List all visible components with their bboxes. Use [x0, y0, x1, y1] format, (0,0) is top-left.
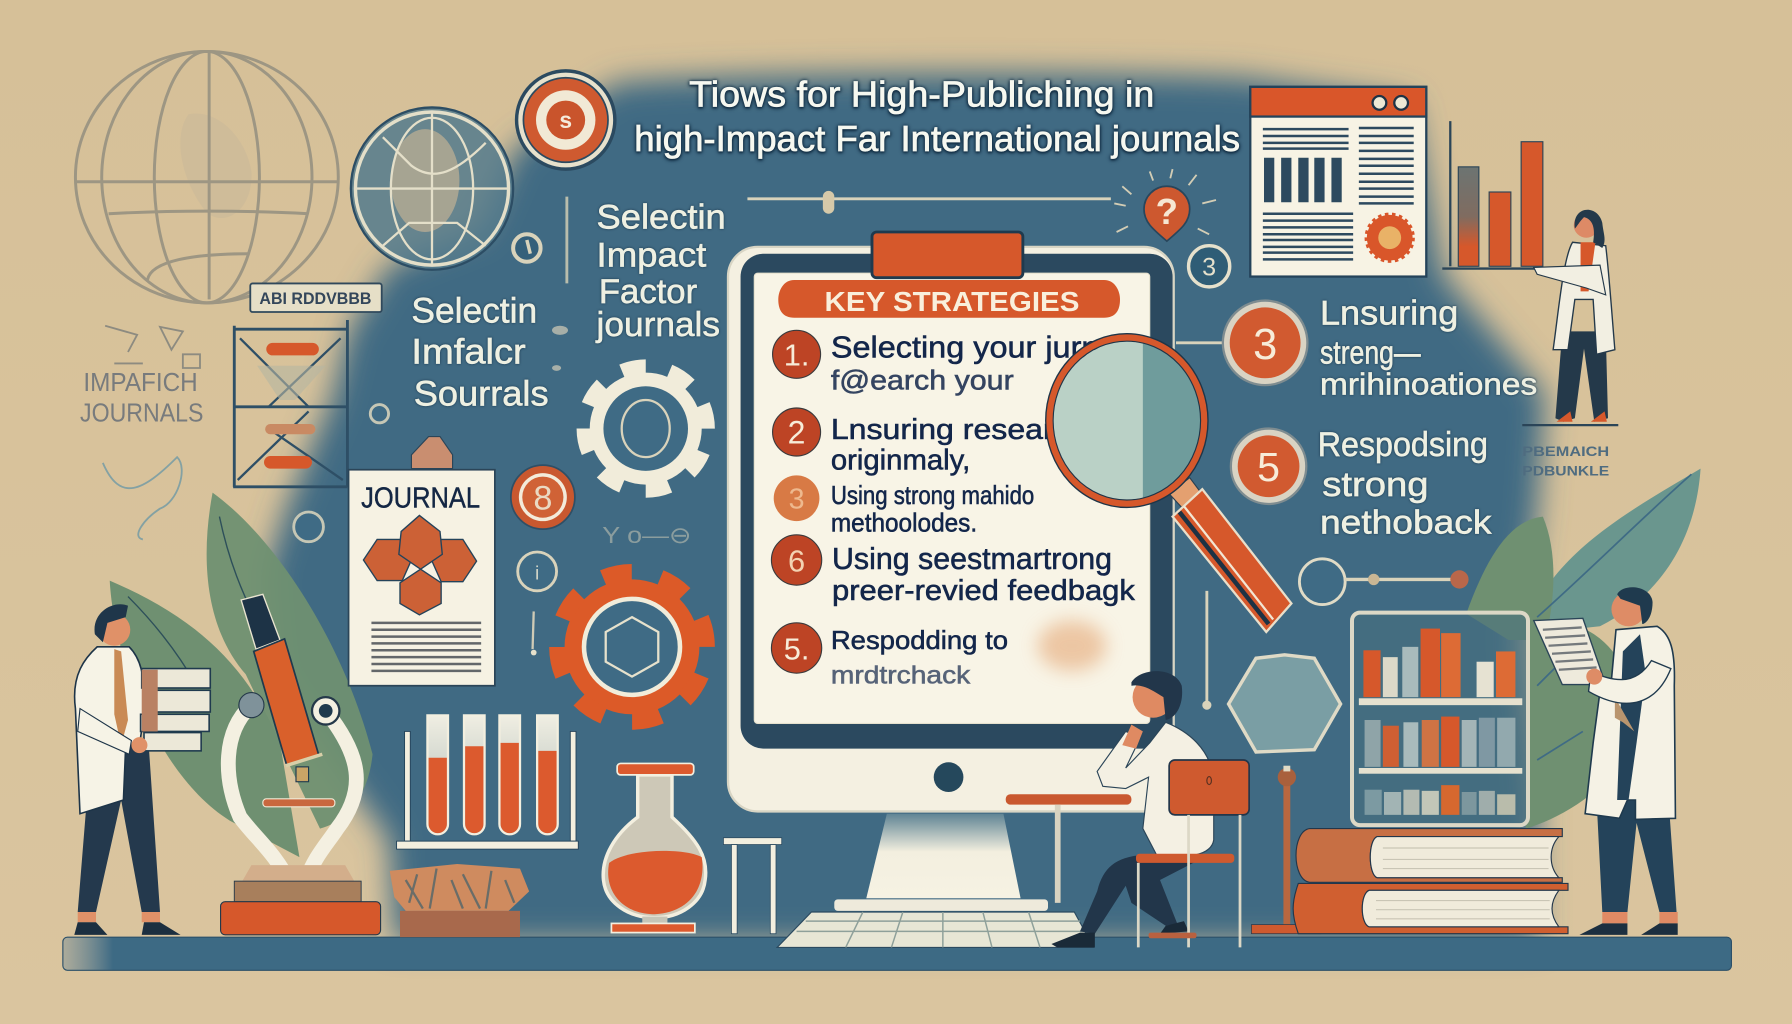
callout: responding: strong [1322, 466, 1429, 504]
leaves: left [110, 493, 373, 857]
gear: cream [565, 348, 726, 509]
bottom row books [1365, 785, 1515, 815]
label: selecting impact factor journals: Impact [597, 236, 707, 274]
coat [1585, 626, 1675, 819]
arm and hand [78, 709, 131, 754]
figure: man with books [74, 604, 210, 935]
figure: man with paper [1534, 587, 1678, 935]
leaves: right [1466, 469, 1701, 829]
icon: large wireframe globe [75, 51, 338, 303]
lab coat [75, 647, 144, 814]
head [1133, 677, 1174, 718]
icon: question bulb [1114, 169, 1216, 241]
label: selectin sourrals [411, 290, 549, 414]
table [1006, 794, 1131, 903]
blue backdrop [265, 73, 1545, 943]
header dots [1373, 96, 1408, 110]
strategy 2: Lnsuring resear [831, 414, 1054, 446]
ankles and shoes [78, 912, 160, 922]
journal text lines [371, 623, 481, 671]
callout: ensuring: streng— [1320, 334, 1421, 370]
strategy 5: mrdtrchack [831, 661, 971, 689]
icon: question bulb: ? [1156, 191, 1178, 232]
journal heading: JOURNAL [361, 482, 480, 514]
handle [1169, 478, 1291, 632]
lens [1054, 342, 1200, 499]
label: selecting impact factor journals: journals [596, 306, 720, 344]
strategy 4 [771, 535, 1136, 607]
monitor [728, 232, 1174, 911]
vertical rod [1202, 591, 1211, 710]
strategy 1: f@earch your [831, 365, 1014, 396]
bar chart [1442, 121, 1557, 269]
big books [1293, 829, 1568, 934]
callout: ensuring [1176, 295, 1537, 401]
icon: target badge [517, 71, 615, 169]
floor [63, 937, 1731, 970]
callout: ensuring: 3 [1253, 321, 1277, 369]
stage [263, 799, 335, 807]
title: Tiows for High-Publiching in [689, 73, 1154, 114]
label: research text faint: PBEMAICH [1522, 444, 1609, 459]
icon: 8 badge [511, 465, 575, 529]
rubble pile [390, 864, 529, 937]
label: faded impact journals: IMPAFICH [83, 367, 198, 397]
label: selectin sourrals: Imfalcr [411, 331, 526, 371]
strategy 1: 1. [784, 338, 809, 373]
chair [1136, 760, 1249, 947]
strategy 4: 6 [788, 543, 805, 578]
strategy 3: Using strong mahido [831, 480, 1034, 510]
tag label: ABI RDDVBBB [259, 289, 371, 308]
head [1611, 592, 1646, 626]
magnifying glass [1046, 334, 1291, 632]
key strategies banner [778, 280, 1120, 318]
icon: target badge: s [559, 107, 572, 133]
bottom book [1293, 883, 1568, 934]
slider line [747, 191, 1111, 214]
clip tab [872, 232, 1023, 278]
title: high-Impact Far International journals [634, 118, 1240, 159]
trousers [1597, 800, 1677, 912]
label: faded impact journals: JOURNALS [80, 398, 203, 428]
label: selecting impact factor journals: Selectin [597, 199, 726, 237]
label: research text faint: PDBUNKLE [1522, 463, 1609, 478]
document header [1250, 87, 1426, 117]
test tube rack [397, 715, 578, 849]
callout: ensuring: Lnsuring [1320, 295, 1458, 333]
figure: seated man [1051, 671, 1214, 947]
head [98, 614, 130, 646]
gear: orange [535, 550, 729, 744]
strategy 5 [771, 623, 1008, 689]
shoes [1051, 921, 1189, 947]
top row books [1363, 629, 1515, 697]
icon: pin ring: i [535, 562, 539, 584]
icon: 8 badge: 8 [533, 480, 552, 518]
icon: pin ring [518, 552, 557, 655]
label: selectin sourrals: Selectin [411, 290, 537, 330]
seal [1367, 215, 1413, 261]
strategy 3: 3 [789, 484, 805, 516]
hair [1131, 671, 1182, 720]
label: faded impact journals [80, 326, 203, 539]
callout: responding: Respodsing [1318, 426, 1488, 464]
strategy 3: methoolodes. [831, 507, 977, 537]
label: selecting impact factor journals: Factor [599, 273, 697, 311]
hexagon [1229, 655, 1341, 752]
middle row books [1365, 717, 1515, 767]
document panel [1250, 87, 1426, 277]
strategy 2 [773, 408, 1054, 477]
keyboard [777, 912, 1094, 947]
arm [1589, 661, 1671, 703]
tubes [427, 715, 558, 834]
callout: responding: nethoback [1320, 505, 1492, 542]
trousers [1080, 855, 1200, 934]
strategy 4: preer-revied feedbagk [832, 575, 1136, 607]
eyepiece [241, 594, 280, 649]
paper [1534, 618, 1606, 685]
strategy 2: originmaly, [831, 445, 970, 477]
faint squiggle text: Y o—⊖ [602, 522, 691, 548]
shelves [1359, 698, 1522, 705]
lamp [1251, 766, 1321, 934]
books stack [141, 669, 210, 751]
stool [723, 838, 782, 934]
strategy 5: 5. [784, 631, 809, 666]
key strategies banner: KEY STRATEGIES [825, 286, 1079, 317]
icon: small globe [351, 107, 513, 270]
monitor stand [866, 814, 1021, 898]
microscope [221, 594, 381, 935]
label: research text faint [1522, 444, 1609, 478]
hair [1617, 587, 1653, 624]
hexagons [363, 515, 477, 615]
base [242, 865, 354, 881]
lens with line [1299, 559, 1469, 605]
button [934, 762, 963, 792]
icon: hourglass shelf [233, 320, 347, 487]
top book [1296, 829, 1562, 882]
tube [254, 639, 319, 766]
callout: ensuring: mrihinoationes [1320, 366, 1537, 401]
tie [114, 649, 128, 745]
tube liquid [429, 743, 557, 833]
ankles and shoes [1602, 912, 1678, 923]
icon: small ring 3 [1189, 246, 1230, 287]
arcs [228, 705, 356, 886]
hand [1122, 725, 1143, 749]
figure: woman with chart [1522, 210, 1618, 425]
trousers [78, 743, 160, 912]
monitor body [728, 247, 1174, 811]
hair [95, 604, 128, 642]
title [634, 73, 1240, 159]
callout: responding [1231, 426, 1492, 542]
strategy 4: Using seestmartrong [832, 541, 1112, 576]
screen [754, 273, 1150, 723]
strategy 2: 2 [788, 414, 805, 450]
flask [603, 763, 706, 933]
text lines [1263, 128, 1414, 259]
divider line and ring icons [294, 197, 568, 542]
bookshelf [1352, 613, 1528, 825]
tag label [250, 283, 382, 312]
journal page [349, 437, 495, 686]
coat [1097, 722, 1214, 857]
label: selecting impact factor journals [596, 199, 726, 344]
label: selectin sourrals: Sourrals [414, 374, 549, 414]
barcode bars [1264, 158, 1342, 202]
strategy 5: Respodding to [831, 625, 1008, 655]
icon: small ring 3: 3 [1202, 253, 1216, 281]
callout: responding: 5 [1257, 444, 1280, 490]
strategy 3 [774, 475, 1034, 537]
strategy 1: Selecting your jurn [831, 330, 1099, 365]
strategy 1 [773, 330, 1099, 396]
bezel [741, 254, 1173, 749]
